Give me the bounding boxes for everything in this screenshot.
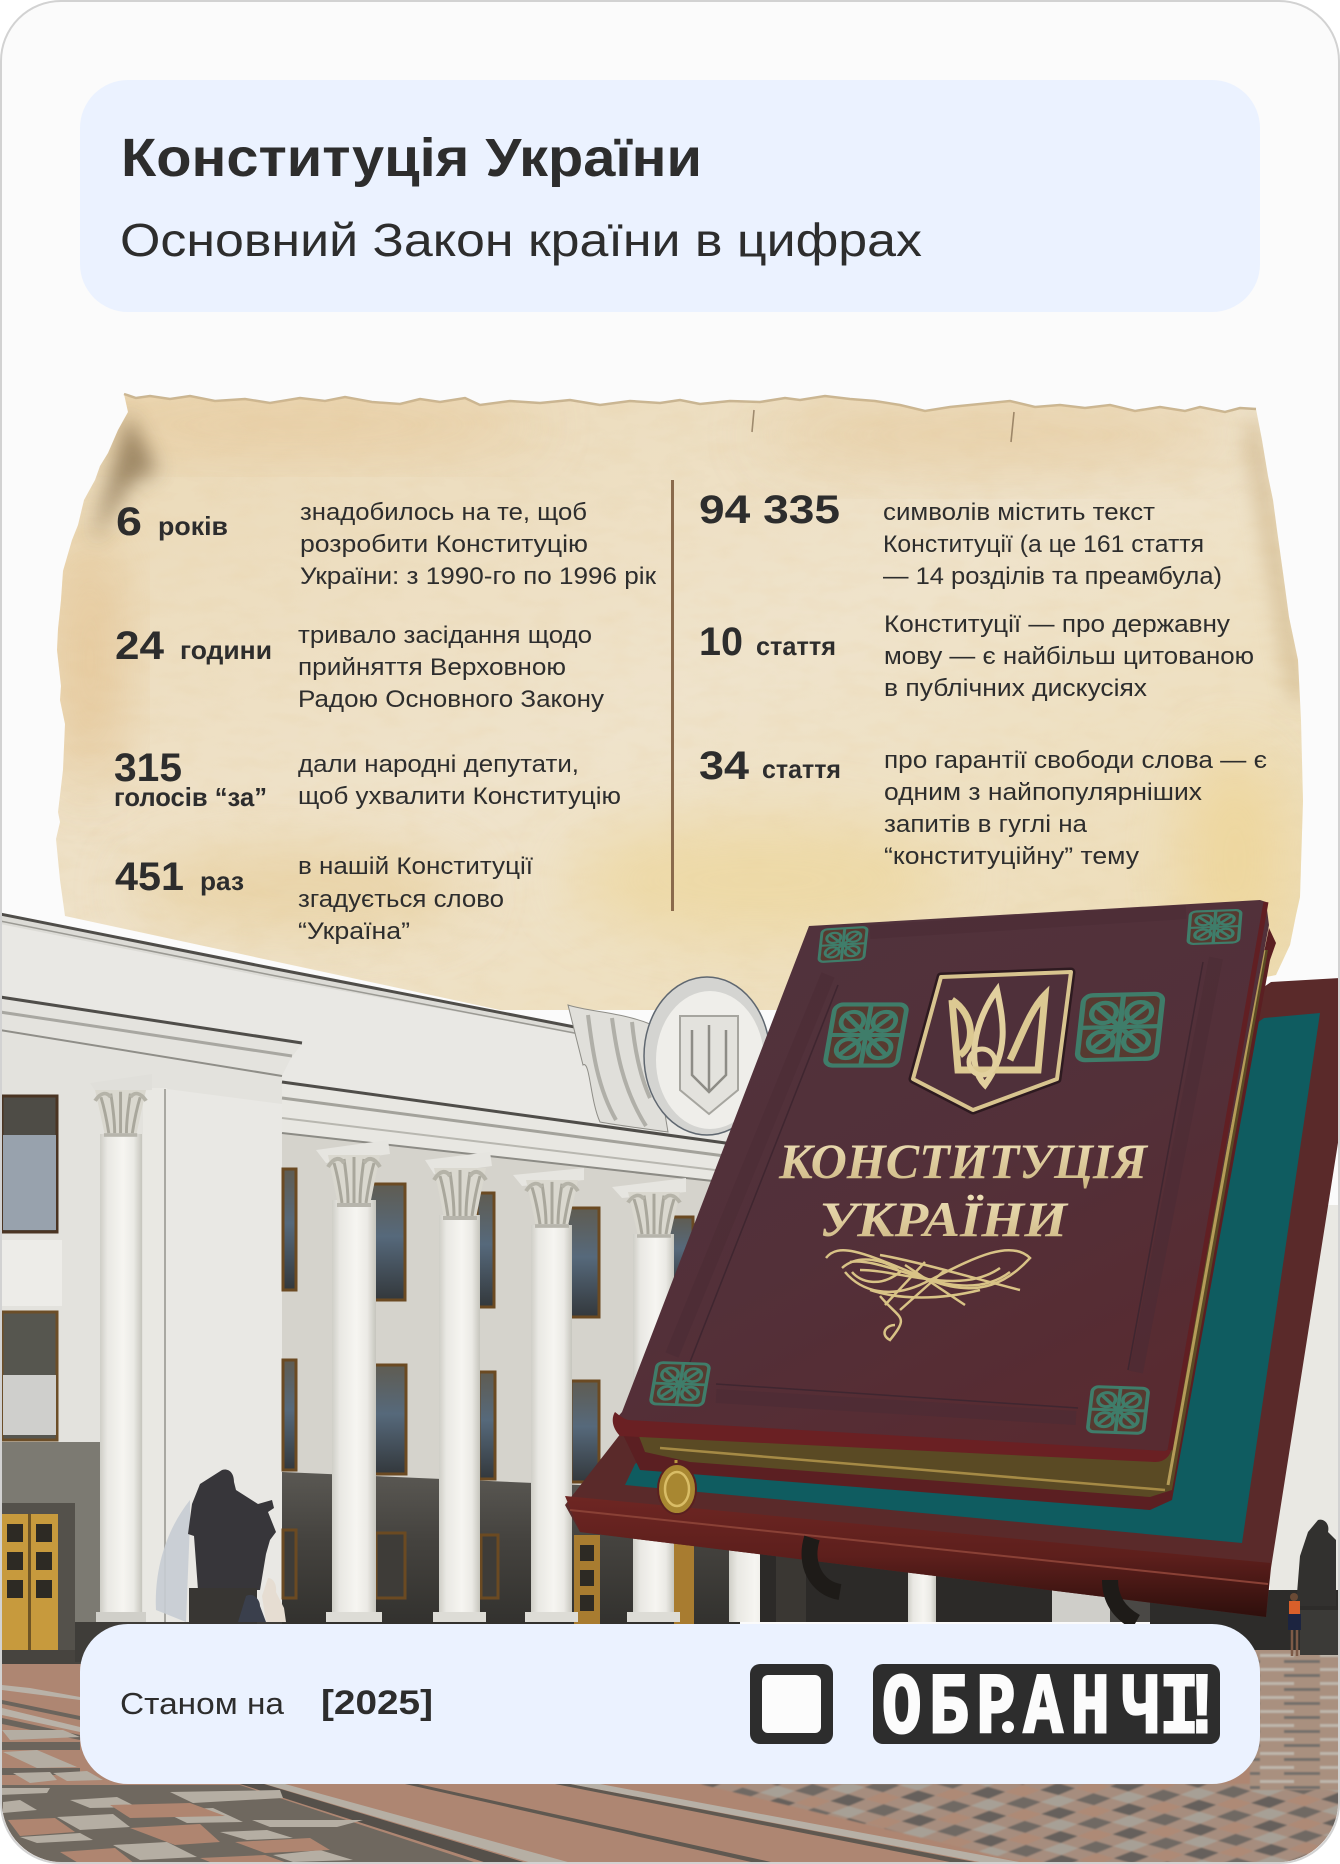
date label: Станом на — [120, 1686, 285, 1721]
header panel — [80, 80, 1260, 312]
stat: 24 години — [115, 622, 604, 713]
stat: 10 стаття: в публічних дискусіях — [884, 675, 1147, 702]
emblem on building — [568, 977, 770, 1135]
footer panel — [80, 1624, 1260, 1784]
stat: 10 стаття: мову — є найбільш цитованою — [884, 643, 1254, 670]
corner ornaments — [650, 910, 1242, 1434]
stat: 6 років: знадобилось на те, щоб — [300, 499, 587, 526]
entablature — [282, 1082, 740, 1184]
stat: 94 335 символів: символів містить текст — [883, 499, 1155, 526]
cover border tooling — [672, 912, 1216, 1418]
decorative feet under stand — [810, 1538, 1136, 1622]
stat: 315 голосів за: голосів “за” — [114, 782, 267, 812]
parchment scroll — [40, 390, 1310, 1020]
stat: 451 раз: “Україна” — [298, 918, 410, 945]
right wing — [1270, 1205, 1340, 1625]
stat: 34 стаття: “конституційну” тему — [884, 843, 1139, 870]
stat: 6 років: України: з 1990-го по 1996 рік — [300, 563, 657, 590]
stat: 6 років: 6 — [116, 500, 142, 544]
year: [2025] — [321, 1684, 433, 1722]
subtitle: Основний Закон країни в цифрах — [120, 214, 922, 266]
stat: 451 раз: згадується слово — [298, 886, 504, 913]
pages — [635, 950, 1268, 1497]
book — [565, 900, 1340, 1622]
back cover — [565, 978, 1340, 1617]
pilaster block — [167, 1089, 282, 1622]
stat: 6 років: розробити Конституцію — [300, 531, 588, 558]
teal page — [625, 1013, 1320, 1543]
parliament building — [0, 914, 1340, 1664]
stat: 94 335 символів — [699, 488, 1222, 590]
stat: 451 раз: раз — [200, 866, 244, 896]
logo square — [750, 1664, 833, 1744]
visitors — [262, 1578, 286, 1622]
stat: 6 років — [116, 499, 657, 590]
book title: КОНСТИТУЦІЯ — [778, 1133, 1149, 1189]
statue: right — [1296, 1520, 1336, 1606]
trident shield — [913, 972, 1071, 1110]
stat: 94 335 символів: — 14 розділів та преамбула) — [883, 563, 1222, 590]
lower book cover — [615, 928, 1276, 1510]
statue: left — [156, 1500, 190, 1622]
left wing wall — [2, 1300, 143, 1612]
stat: 451 раз — [115, 853, 533, 945]
left base and door — [0, 1442, 100, 1622]
stat: 6 років: років — [158, 511, 228, 541]
stat: 10 стаття: стаття — [756, 631, 836, 661]
stat: 34 стаття — [699, 744, 1267, 870]
stat: 34 стаття: одним з найпопулярніших — [884, 779, 1202, 806]
pavement — [0, 1645, 1340, 1864]
medallion — [658, 1460, 696, 1514]
front cover — [615, 900, 1269, 1458]
colonnade dark base — [282, 1472, 740, 1640]
stat: 10 стаття — [699, 611, 1254, 702]
upper wall — [2, 924, 730, 1142]
stat: 24 години: прийняття Верховною — [298, 654, 566, 681]
stat: 10 стаття: 10 — [699, 620, 743, 664]
book title: УКРАЇНИ — [819, 1191, 1069, 1247]
lower columns under book — [729, 1530, 776, 1622]
colonnade back wall — [282, 1133, 740, 1640]
left column — [100, 1134, 142, 1620]
stat: 10 стаття: Конституції — про державну — [884, 611, 1230, 638]
stat: 24 години: 24 — [115, 624, 165, 668]
book title — [778, 1133, 1149, 1247]
stat: 24 години: години — [180, 635, 272, 665]
stat: 315 голосів за: 315 — [114, 746, 182, 790]
person on right — [1288, 1593, 1301, 1656]
stat: 34 стаття: 34 — [699, 744, 750, 788]
gold flourish — [826, 1250, 1030, 1340]
stat: 94 335 символів: Конституції (а це 161 стаття — [883, 531, 1204, 558]
colonnade windows — [283, 1169, 693, 1482]
stat: 315 голосів за — [115, 753, 620, 809]
stand bar — [565, 1496, 1271, 1617]
divider line — [671, 480, 674, 911]
stat: 34 стаття: стаття — [762, 754, 841, 784]
logo wordmark: ОБРАНЧІ! — [882, 1661, 1221, 1758]
columns — [316, 1140, 686, 1622]
stat: 315 голосів за: щоб ухвалити Конституцію — [298, 783, 621, 810]
left windows — [2, 1096, 57, 1232]
left cornice — [0, 997, 302, 1076]
stat: 451 раз: 451 — [115, 855, 184, 899]
stat: 24 години: Радою Основного Закону — [298, 686, 604, 713]
stat: 24 години: тривало засідання щодо — [298, 622, 592, 649]
stat: 94 335 символів: 94 335 — [699, 488, 840, 532]
stat: 451 раз: в нашій Конституції — [298, 853, 533, 880]
stat: 315 голосів за: дали народні депутати, — [298, 751, 579, 778]
title: Конституція України — [121, 128, 702, 188]
stat: 34 стаття: запитів в гуглі на — [884, 811, 1088, 838]
stat: 34 стаття: про гарантії свободи слова — є — [884, 747, 1267, 774]
